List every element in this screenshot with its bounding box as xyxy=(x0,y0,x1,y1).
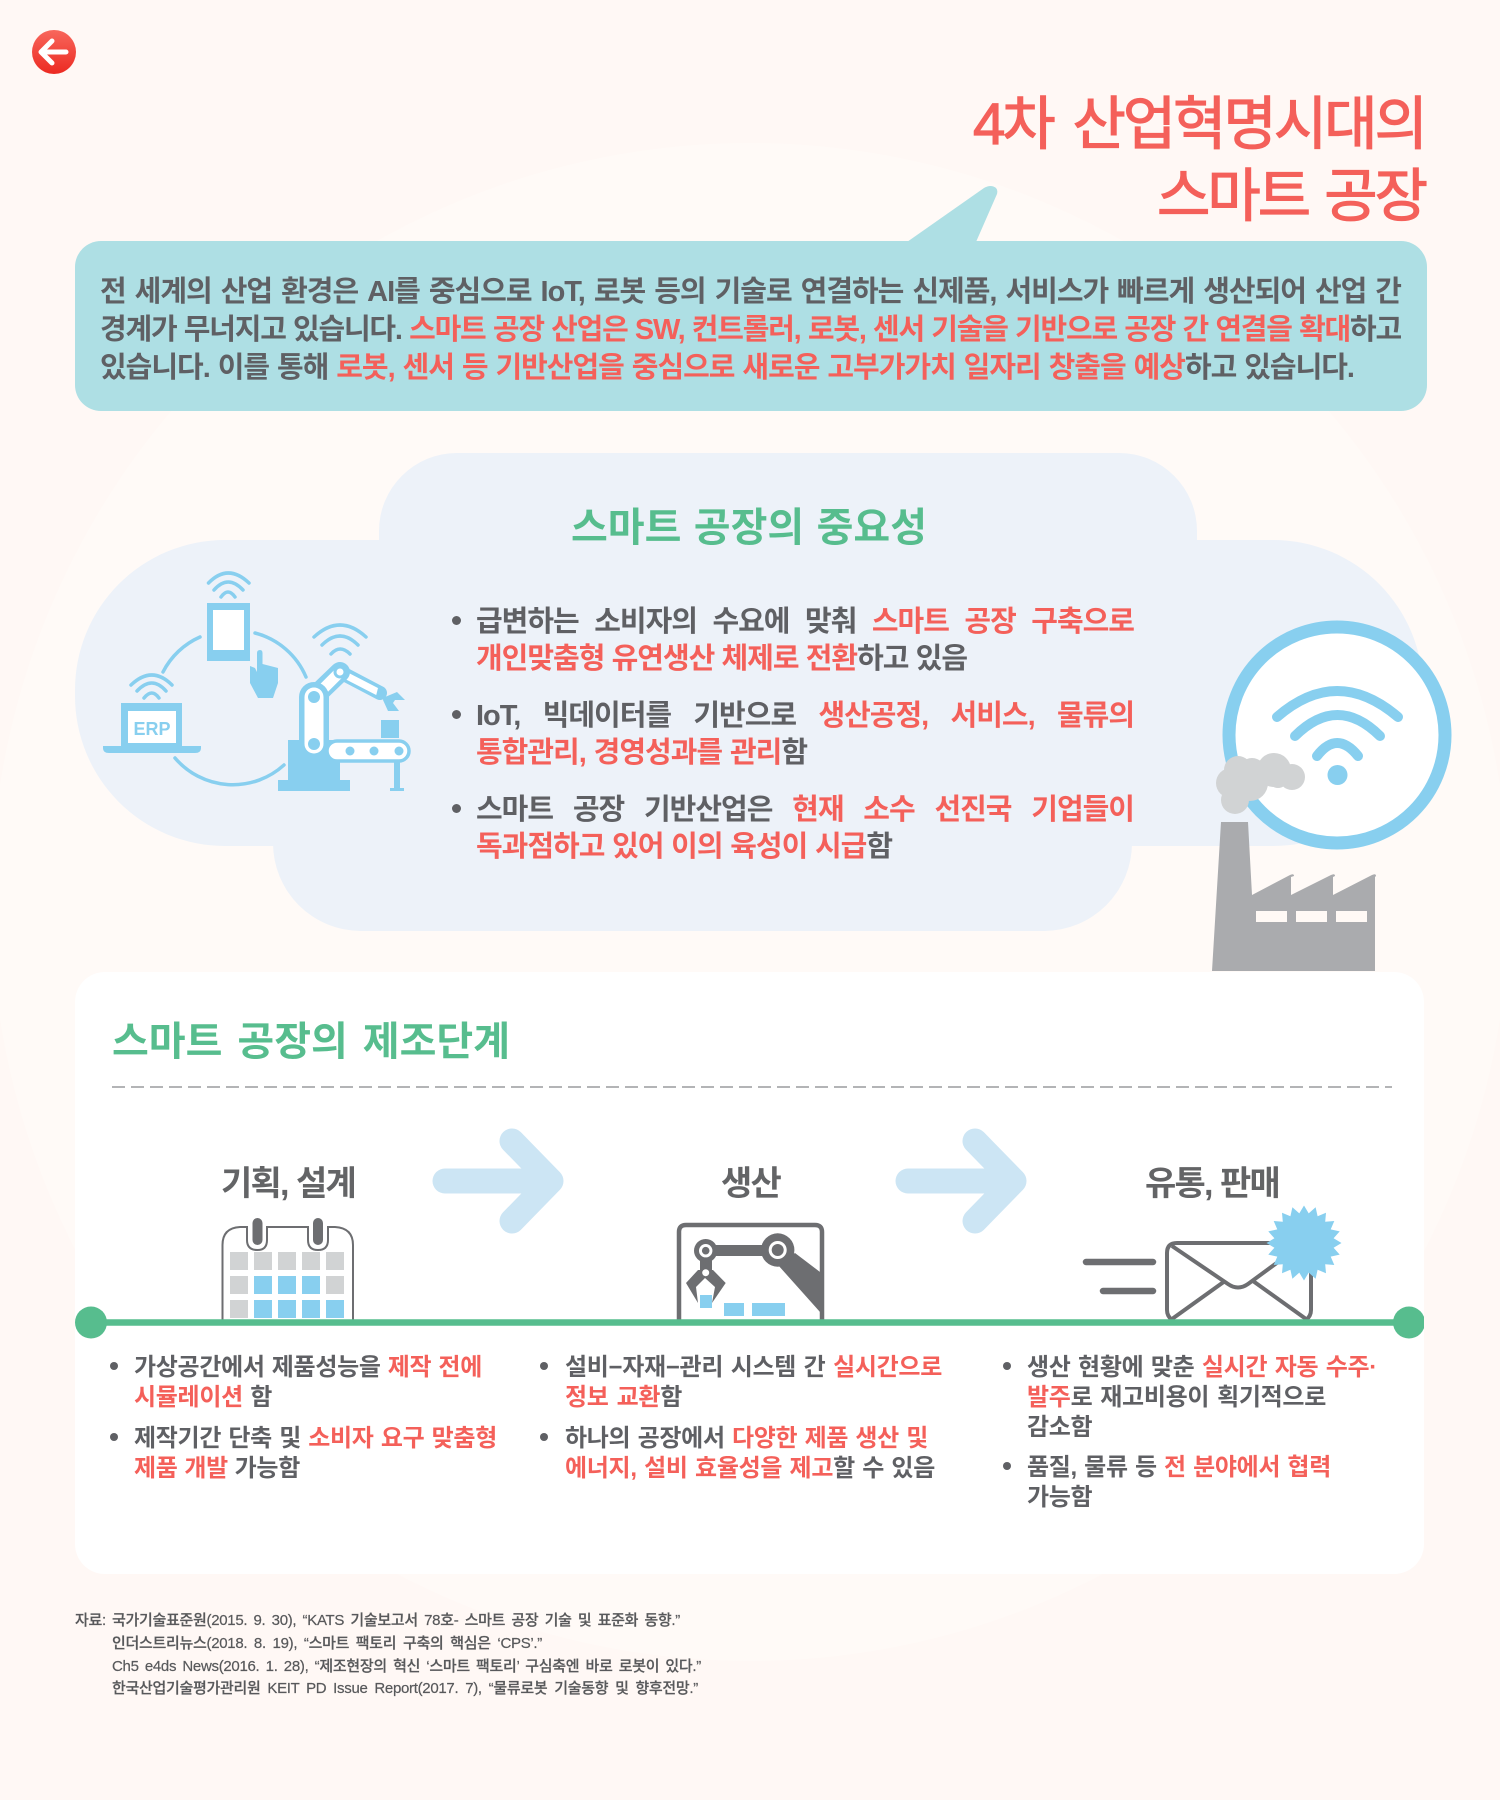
bullet: automatic ordering: 발주로 재고비용이 획기적으로 xyxy=(1027,1384,1326,1411)
bullet: cooperation across fields: 가능함 xyxy=(1027,1484,1092,1511)
bullet: cooperation across fields: 품질, 물류 등 전 분야에서 협력 xyxy=(1027,1454,1331,1481)
step heading: distribution: 유통, 판매 xyxy=(1145,1165,1279,1203)
bullet: automatic ordering: 생산 현황에 맞춘 실시간 자동 수주· xyxy=(1027,1354,1377,1381)
step: production xyxy=(540,1165,942,1482)
bullet: base industry xyxy=(452,794,1134,863)
bullet: diverse products xyxy=(540,1425,935,1482)
bullet: shorter production time: 제품 개발 가능함 xyxy=(134,1455,300,1482)
bullet: IoT and big data: 통합관리, 경영성과를 관리함 xyxy=(476,737,807,769)
heading: importance: 스마트 공장의 중요성 xyxy=(571,506,927,550)
intro text: 전 세계의 산업 환경은 AI를 중심으로 IoT, 로봇 등의 기술로 연결하는 신제품, 서비스가 빠르게 생산되어 산업 간 xyxy=(100,276,1401,308)
arrow: planning to production xyxy=(432,1128,564,1234)
sources footnote xyxy=(75,1612,701,1697)
bullet: base industry: 스마트 공장 기반산업은 현재 소수 선진국 기업들이 xyxy=(476,794,1134,826)
sources footnote: Ch5 e4ds News(2016. 1. 28), “제조현장의 혁신 ‘스마트 팩토리’ 구심축엔 바로 로봇이 있다.” xyxy=(112,1658,701,1675)
panel: importance cloud xyxy=(75,453,1418,931)
bullet: IoT and big data xyxy=(452,700,1134,769)
intro text xyxy=(100,276,1402,384)
sources footnote: 자료: xyxy=(75,1612,106,1629)
icon: connected ERP, tablet and robot xyxy=(103,571,411,791)
icon: robot arm in frame xyxy=(676,1222,824,1320)
bullet: consumer demand xyxy=(452,606,1134,675)
bullet: shorter production time xyxy=(110,1425,497,1482)
bullet: consumer demand: 개인맞춤형 유연생산 체제로 전환하고 있음 xyxy=(476,643,967,675)
bullet: real-time exchange xyxy=(540,1354,942,1411)
intro text: 있습니다. 이를 통해 로봇, 센서 등 기반산업을 중심으로 새로운 고부가가치 일자리 창출을 예상하고 있습니다. xyxy=(100,352,1354,384)
bullet: base industry: 독과점하고 있어 이의 육성이 시급함 xyxy=(476,831,892,863)
sources footnote: 한국산업기술평가관리원 KEIT PD Issue Report(2017. 7), “물류로봇 기술동향 및 향후전망.” xyxy=(112,1680,698,1697)
bullet: simulation xyxy=(110,1354,482,1411)
arrow: production to distribution xyxy=(896,1128,1026,1234)
step heading: production: 생산 xyxy=(721,1165,780,1203)
bullet: diverse products: 에너지, 설비 효율성을 제고할 수 있음 xyxy=(565,1455,935,1482)
panel: manufacturing stages xyxy=(75,972,1424,1574)
bullet: IoT and big data: IoT, 빅데이터를 기반으로 생산공정, 서비스, 물류의 xyxy=(476,700,1134,732)
bullet: diverse products: 하나의 공장에서 다양한 제품 생산 및 xyxy=(565,1425,928,1452)
icon: connected ERP, tablet and robot: ERP xyxy=(133,719,171,739)
bullet: simulation: 시뮬레이션 함 xyxy=(134,1384,272,1411)
heading: manufacturing stages: 스마트 공장의 제조단계 xyxy=(112,1020,510,1064)
title: 스마트 공장 xyxy=(1157,164,1425,229)
icon: wifi circle and factory xyxy=(1212,620,1452,971)
step heading: planning: 기획, 설계 xyxy=(221,1165,355,1203)
step: planning and design xyxy=(110,1165,497,1482)
bullet: automatic ordering xyxy=(1003,1354,1377,1441)
bullet: simulation: 가상공간에서 제품성능을 제작 전에 xyxy=(134,1354,482,1381)
icon: calendar xyxy=(222,1218,354,1320)
timeline xyxy=(75,1306,1424,1338)
bullet: shorter production time: 제작기간 단축 및 소비자 요구 맞춤형 xyxy=(134,1425,497,1452)
bullet: real-time exchange: 정보 교환함 xyxy=(565,1384,682,1411)
intro text: 경계가 무너지고 있습니다. 스마트 공장 산업은 SW, 컨트롤러, 로봇, 센서 기술을 기반으로 공장 간 연결을 확대하고 xyxy=(100,314,1401,346)
bullet: automatic ordering: 감소함 xyxy=(1027,1414,1092,1441)
title xyxy=(973,92,1427,229)
bullet: cooperation across fields xyxy=(1003,1454,1331,1511)
sources footnote: 국가기술표준원(2015. 9. 30), “KATS 기술보고서 78호- 스마트 공장 기술 및 표준화 동향.” xyxy=(112,1612,680,1629)
sources footnote: 인더스트리뉴스(2018. 8. 19), “스마트 팩토리 구축의 핵심은 ‘CPS’.” xyxy=(112,1635,542,1652)
icon: envelope with badge xyxy=(1082,1206,1342,1320)
title: 4차 산업혁명시대의 xyxy=(973,92,1425,157)
step: distribution and sales xyxy=(1003,1165,1377,1511)
bullet: consumer demand: 급변하는 소비자의 수요에 맞춰 스마트 공장 구축으로 xyxy=(476,606,1134,638)
icon: back button xyxy=(32,30,76,74)
panel: introduction speech bubble xyxy=(75,186,1427,411)
bullet: real-time exchange: 설비−자재−관리 시스템 간 실시간으로 xyxy=(565,1354,942,1381)
